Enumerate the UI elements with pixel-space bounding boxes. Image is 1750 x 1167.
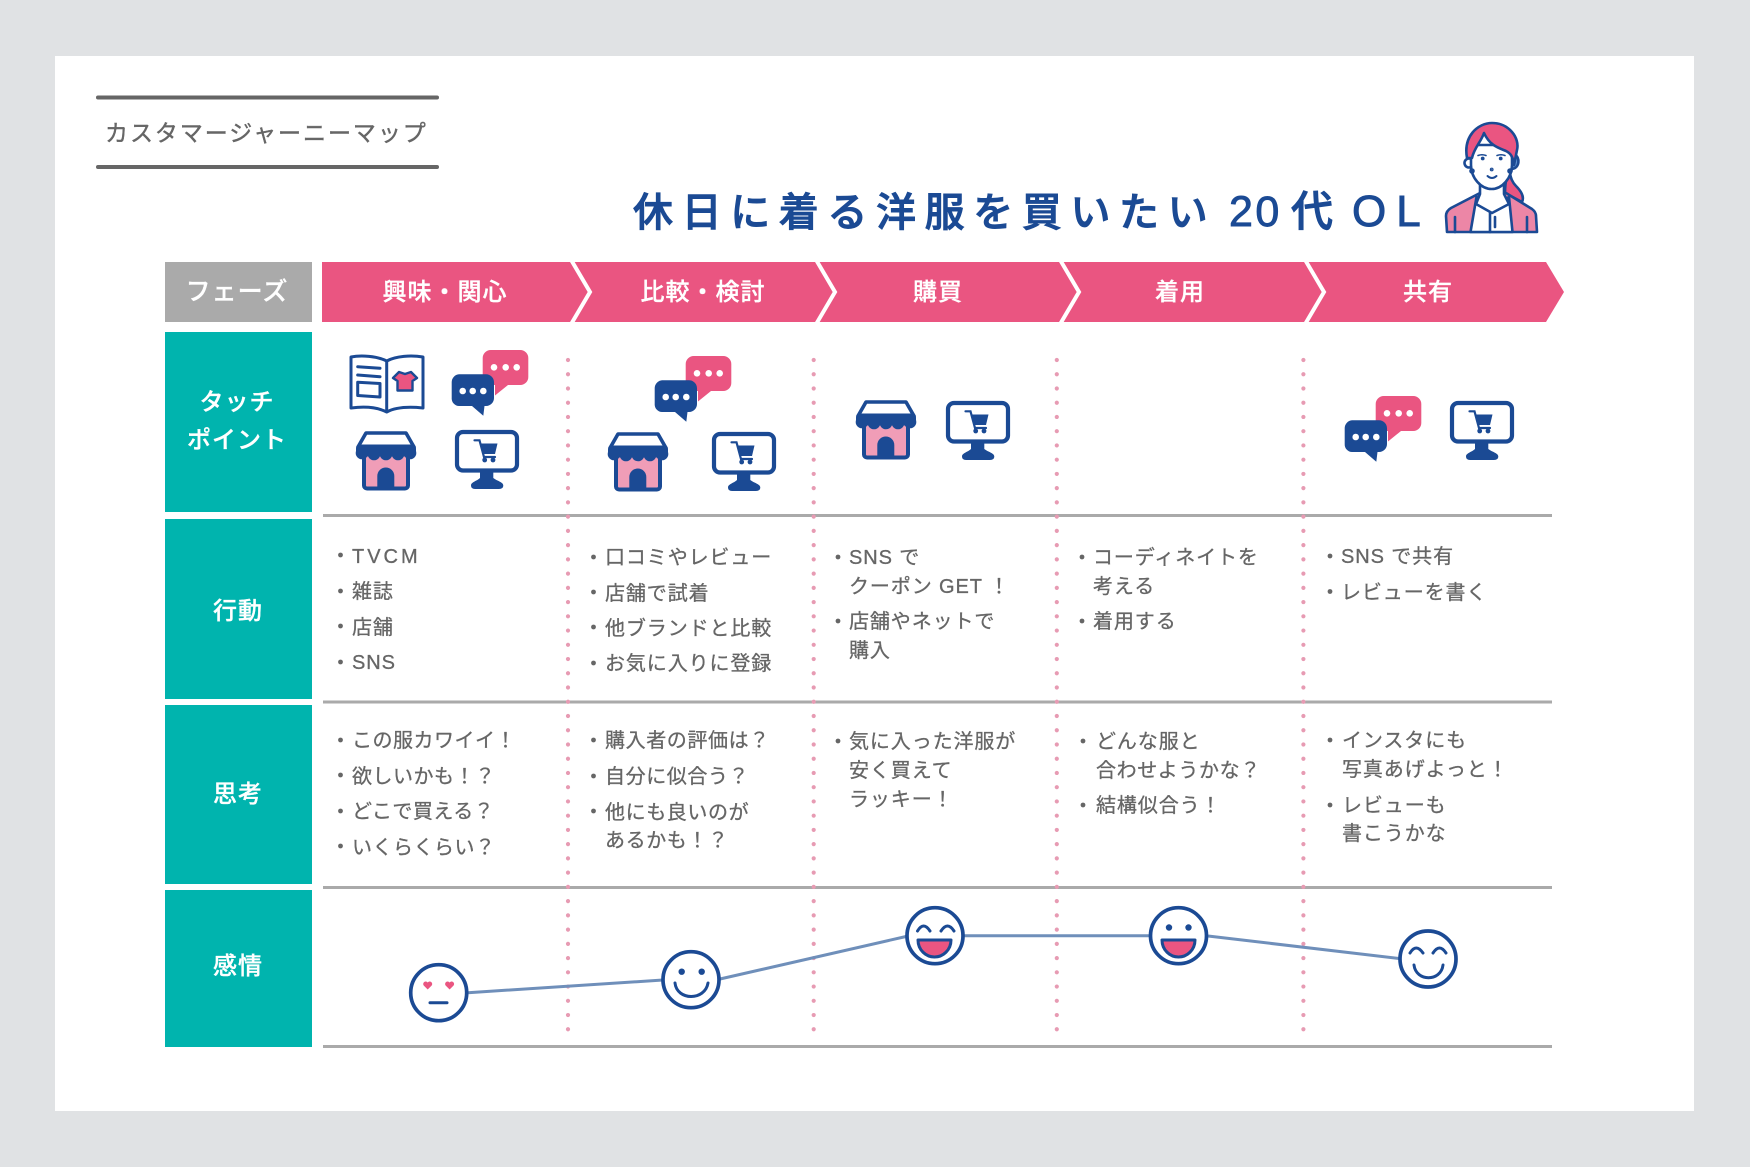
- phase: purchase: 購買: [913, 279, 963, 306]
- thoughts: share: [1328, 729, 1509, 845]
- thoughts: wear: [1081, 730, 1261, 817]
- phase label: [165, 262, 312, 322]
- row label: thoughts: [165, 705, 312, 884]
- phase: share: 共有: [1403, 279, 1453, 306]
- face: neutral with heart eyes: [411, 965, 467, 1021]
- thoughts: share: インスタにも: [1342, 729, 1467, 752]
- phase arrows: [322, 258, 1564, 326]
- actions: share: [1328, 545, 1487, 604]
- icon: online shop monitor: [1452, 403, 1512, 460]
- actions: interest: 雑誌: [352, 580, 394, 603]
- actions: compare: [591, 546, 772, 675]
- thoughts: interest: 欲しいかも！？: [352, 765, 496, 788]
- icon: online shop monitor: [457, 432, 517, 489]
- icon: woman persona: [1446, 123, 1537, 232]
- thoughts: share: レビューも: [1342, 794, 1446, 817]
- row label: actions: [165, 519, 312, 699]
- icon: chat bubbles: [452, 350, 528, 416]
- title: 代: [1291, 188, 1333, 235]
- row label: touchpoints: ポイント: [187, 427, 287, 454]
- thoughts: interest: いくらくらい？: [352, 837, 496, 859]
- actions: wear: 考える: [1093, 575, 1155, 598]
- actions: wear: 着用する: [1093, 610, 1177, 633]
- icon: store: [356, 433, 416, 490]
- actions: wear: [1080, 546, 1259, 633]
- thoughts: purchase: 気に入った洋服が: [849, 730, 1016, 753]
- thoughts: compare: 自分に似合う？: [605, 765, 749, 788]
- emotion line chart: [411, 908, 1456, 1021]
- icon: online shop monitor: [948, 403, 1008, 460]
- face: joyful: [1400, 931, 1456, 987]
- actions: purchase: クーポン GET ！: [849, 575, 1010, 598]
- actions: share: レビューを書く: [1341, 581, 1487, 604]
- thoughts: share: 写真あげよっと！: [1342, 758, 1509, 781]
- icon: online shop monitor: [714, 434, 774, 491]
- icon: store: [608, 434, 668, 491]
- row label: thoughts: 思考: [213, 781, 263, 808]
- touchpoint icons: purchase: [856, 402, 1008, 460]
- actions: interest: 店舗: [352, 616, 394, 639]
- thoughts: interest: [338, 730, 516, 859]
- title: 休日に着る洋服を買いたい: [633, 191, 1216, 235]
- thoughts: interest: この服カワイイ！: [352, 730, 516, 752]
- thoughts: compare: [591, 729, 770, 852]
- touchpoint icons: share: [1345, 396, 1512, 462]
- thoughts: wear: 合わせようかな？: [1096, 759, 1261, 782]
- title: [633, 187, 1431, 236]
- actions: purchase: SNS で: [849, 547, 920, 569]
- touchpoint icons: compare: [608, 356, 774, 491]
- row label: touchpoints: タッチ: [200, 389, 274, 416]
- thoughts: purchase: [836, 730, 1016, 811]
- thoughts: purchase: 安く買えて: [849, 759, 952, 782]
- phase: wear: 着用: [1155, 279, 1205, 306]
- thoughts: purchase: ラッキー！: [849, 789, 954, 811]
- phase: compare: 比較・検討: [640, 279, 766, 306]
- actions: compare: 店舗で試着: [605, 582, 710, 605]
- phase: interest: 興味・関心: [382, 279, 508, 306]
- trend line: [468, 936, 1399, 993]
- thoughts: compare: 他にも良いのが: [605, 801, 749, 824]
- thoughts: share: 書こうかな: [1342, 822, 1446, 845]
- row label: emotions: [165, 890, 312, 1047]
- thoughts: interest: どこで買える？: [352, 800, 494, 823]
- thoughts: wear: どんな服と: [1096, 730, 1200, 753]
- title: OL: [1352, 187, 1431, 236]
- thoughts: wear: 結構似合う！: [1096, 794, 1221, 817]
- phase label: フェーズ: [186, 278, 288, 306]
- icon: chat bubbles: [1345, 396, 1421, 462]
- actions: purchase: 店舗やネットで: [849, 610, 995, 633]
- row label: emotions: 感情: [213, 952, 263, 980]
- face: happy: [1150, 908, 1206, 964]
- actions: interest: SNS: [352, 652, 396, 674]
- touchpoint icons: interest: [351, 350, 528, 490]
- actions: share: SNS で共有: [1341, 545, 1454, 568]
- heading: map label: カスタマージャーニーマップ: [105, 120, 428, 146]
- title: 20: [1229, 188, 1282, 236]
- actions: purchase: 購入: [849, 639, 891, 662]
- actions: compare: お気に入りに登録: [605, 652, 772, 675]
- icon: store: [856, 402, 916, 459]
- thoughts: compare: あるかも！？: [605, 830, 729, 852]
- icon: magazine: [351, 356, 423, 412]
- row label: touchpoints: [165, 332, 312, 512]
- actions: wear: コーディネイトを: [1093, 546, 1259, 569]
- row label: actions: 行動: [213, 598, 263, 625]
- face: laughing: [907, 908, 963, 964]
- actions: compare: 他ブランドと比較: [605, 616, 772, 640]
- actions: interest: TVCM: [352, 546, 421, 568]
- actions: interest: [338, 546, 421, 674]
- icon: chat bubbles: [655, 356, 731, 422]
- thoughts: compare: 購入者の評価は？: [605, 729, 770, 752]
- face: smile: [663, 952, 719, 1008]
- heading: map label: [96, 96, 439, 169]
- actions: compare: 口コミやレビュー: [605, 546, 772, 569]
- actions: purchase: [836, 547, 1010, 662]
